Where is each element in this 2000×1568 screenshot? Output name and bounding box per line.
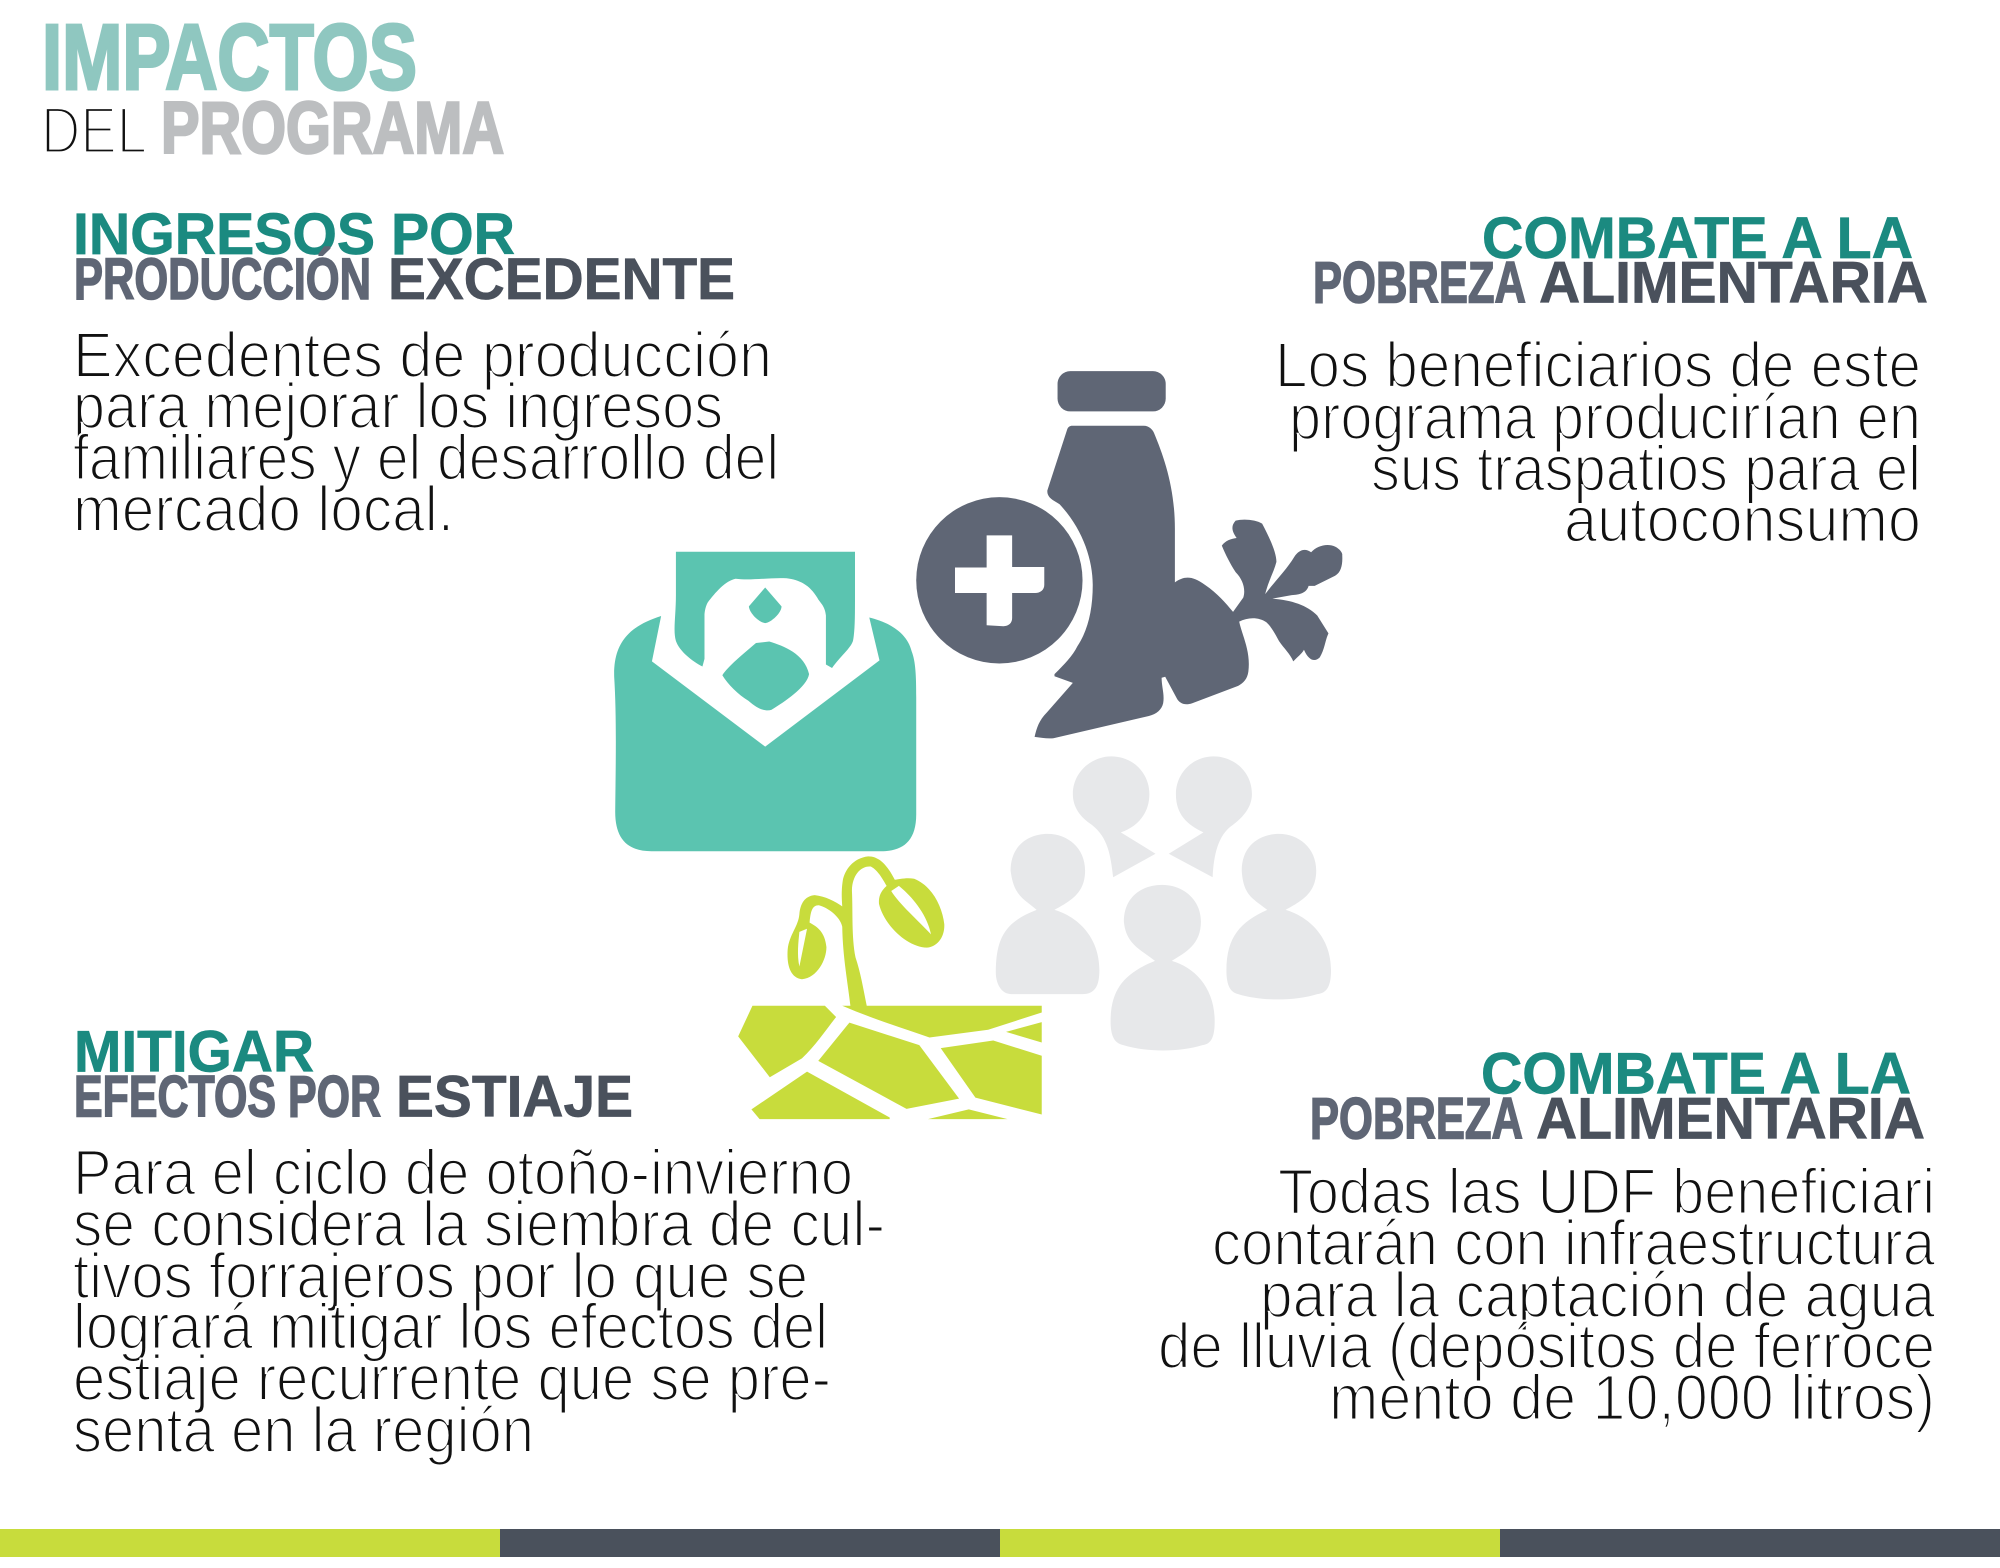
text block: combate inferior: contarán con infraestructura [1212, 1207, 1935, 1279]
panel: mitigar efectos por estiaje [73, 1020, 885, 1466]
text block: mitigar: se considera la siembra de cul- [73, 1188, 885, 1260]
panel: combate a la pobreza alimentaria (inferior) [1158, 1042, 1935, 1434]
text block: ingresos: mercado local. [73, 473, 454, 545]
text block: mitigar: logrará mitigar los efectos del [73, 1290, 828, 1362]
text block: mitigar [73, 1136, 885, 1466]
text block: combate superior: Los beneficiarios de este [1275, 329, 1921, 401]
heading: ingresos: INGRESOS POR [73, 202, 515, 267]
text block: combate inferior: de lluvia (depósitos de ferroce [1158, 1310, 1935, 1382]
text block: ingresos: para mejorar los ingresos [73, 370, 723, 442]
text block: combate superior: autoconsumo [1564, 484, 1921, 556]
text block: combate inferior: Todas las UDF beneficiari [1278, 1156, 1935, 1228]
heading: mitigar: MITIGAR [74, 1020, 314, 1084]
text block: mitigar: Para el ciclo de otoño-invierno [73, 1136, 853, 1208]
panel: combate a la pobreza alimentaria (superior) [1275, 206, 1928, 556]
text block: combate superior [1275, 329, 1921, 556]
heading: mitigar: ESTIAJE [396, 1064, 633, 1130]
heading: combate inferior [1310, 1042, 1925, 1152]
text block: mitigar: tivos forrajeros por lo que se [73, 1240, 808, 1312]
title: DEL [41, 93, 147, 167]
heading: combate inferior: POBREZA [1310, 1086, 1523, 1152]
heading: ingresos [73, 202, 735, 312]
title: IMPACTOS [42, 5, 417, 109]
panel: ingresos por producción excedente [73, 202, 779, 545]
icon: wilting plant on cracked soil [738, 856, 1042, 1119]
heading: combate inferior: COMBATE A LA [1481, 1042, 1911, 1106]
text block: ingresos: familiares y el desarrollo del [73, 422, 779, 494]
heading: mitigar [74, 1020, 633, 1130]
text block: ingresos: Excedentes de producción [73, 319, 772, 391]
icon: group of people [996, 756, 1331, 1050]
heading: mitigar: EFECTOS POR [74, 1064, 381, 1130]
text block: ingresos [73, 319, 779, 545]
text block: mitigar: senta en la región [73, 1394, 534, 1466]
footer color band [0, 1529, 2000, 1557]
heading: combate superior: POBREZA [1313, 250, 1526, 316]
text block: combate inferior: mento de 10,000 litros) [1329, 1362, 1935, 1434]
heading: combate superior [1313, 206, 1928, 316]
heading: combate superior: ALIMENTARIA [1539, 250, 1928, 316]
title [41, 5, 504, 169]
text block: combate inferior: para la captación de agua [1260, 1259, 1935, 1331]
heading: ingresos: PRODUCCIÓN [74, 247, 371, 312]
text block: mitigar: estiaje recurrente que se pre- [73, 1342, 831, 1414]
icon: envelope with money [614, 552, 916, 851]
heading: combate inferior: ALIMENTARIA [1536, 1086, 1925, 1152]
heading: ingresos: EXCEDENTE [388, 247, 735, 312]
text block: combate superior: programa producirían en [1289, 381, 1921, 453]
text block: combate superior: sus traspatios para el [1371, 432, 1921, 504]
title: PROGRAMA [161, 88, 504, 169]
text block: combate inferior [1158, 1156, 1935, 1434]
icon: bottle, plus sign and carrot [916, 371, 1342, 738]
heading: combate superior: COMBATE A LA [1482, 206, 1913, 271]
